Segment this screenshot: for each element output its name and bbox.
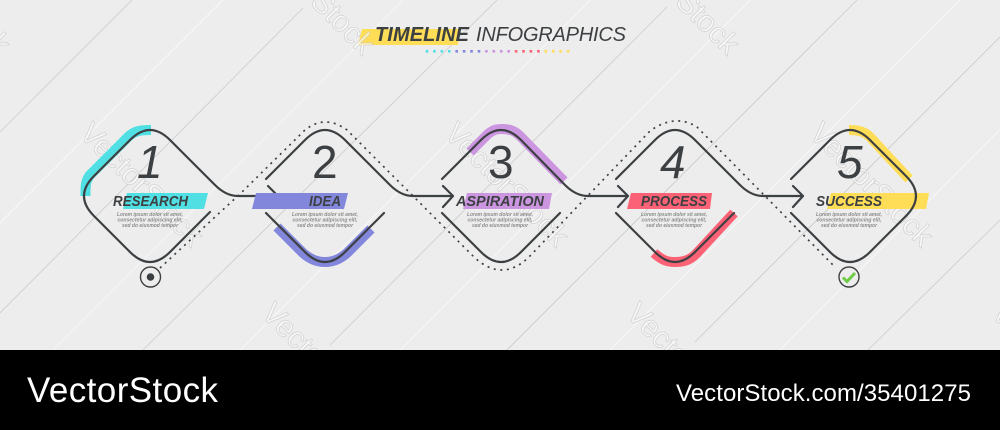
description: Lorem ipsum dolor sit amet, (641, 212, 707, 218)
description: sed do eiusmod tempor (821, 223, 878, 229)
description: consectetur adipiscing elit, (118, 218, 183, 224)
label process: PROCESS (641, 194, 707, 210)
accent: purple top (470, 129, 564, 181)
step 1: research (84, 130, 278, 262)
description: sed do eiusmod tempor (297, 223, 354, 229)
watermarks: VectorStock (73, 117, 210, 254)
description (292, 212, 358, 229)
description: Lorem ipsum dolor sit amet, (117, 212, 183, 218)
description: sed do eiusmod tempor (646, 223, 703, 229)
accent: blue bottom (277, 227, 371, 262)
title text: TIMELINE (375, 24, 470, 46)
accent: yellow top right (849, 130, 909, 179)
title (358, 24, 627, 46)
label band: red (627, 193, 712, 209)
description: consectetur adipiscing elit, (642, 218, 707, 224)
watermarks: VectorStock (803, 117, 940, 254)
diamond outline and arrow (84, 130, 278, 262)
step 2: idea (252, 130, 453, 262)
number 3: 3 (488, 136, 514, 188)
number 1: 1 (137, 136, 163, 188)
description (467, 212, 533, 229)
diamond outline (791, 130, 916, 262)
step 3: aspiration (442, 129, 628, 262)
watermarks: VectorStock (438, 117, 575, 254)
description: Lorem ipsum dolor sit amet, (292, 212, 358, 218)
description (641, 212, 707, 229)
label band: yellow (827, 193, 929, 209)
description: sed do eiusmod tempor (122, 223, 179, 229)
number 4: 4 (660, 136, 686, 188)
start marker (140, 267, 160, 287)
label band: purple (463, 193, 552, 209)
dotted connector path (160, 121, 833, 270)
footer brand: VectorStock (27, 371, 218, 410)
title highlight (358, 29, 460, 45)
title text: INFOGRAPHICS (476, 24, 627, 46)
diamond outline and arrow (442, 130, 628, 262)
description: Lorem ipsum dolor sit amet, (816, 212, 882, 218)
description: sed do eiusmod tempor (472, 223, 529, 229)
description: Lorem ipsum dolor sit amet, (467, 212, 533, 218)
watermarks: VectorStock (255, 297, 392, 430)
title dots (426, 50, 569, 53)
label band: blue (252, 193, 348, 209)
step 4: process (616, 130, 803, 262)
footer bar (0, 350, 1000, 430)
number 2: 2 (312, 136, 338, 188)
description: consectetur adipiscing elit, (292, 218, 358, 224)
step 5: success (791, 130, 929, 262)
watermarks: VectorStock (620, 297, 757, 430)
diamond outline and arrow (266, 130, 453, 262)
number 5: 5 (837, 136, 863, 188)
diamond outline and arrow (616, 130, 803, 262)
footer image id: VectorStock.com/35401275 (676, 380, 971, 407)
end marker: green check (839, 267, 859, 287)
label research: RESEARCH (113, 194, 188, 210)
accent: cyan corner (85, 130, 151, 196)
label aspiration: ASPIRATION (455, 194, 545, 210)
label idea: IDEA (309, 194, 341, 210)
label band: cyan (123, 193, 208, 209)
description (117, 212, 183, 229)
accent: red bottom right (654, 213, 734, 262)
description: consectetur adipiscing elit, (468, 218, 533, 224)
description (816, 212, 882, 229)
description: consectetur adipiscing elit, (816, 218, 882, 224)
label success: SUCCESS (816, 194, 882, 210)
